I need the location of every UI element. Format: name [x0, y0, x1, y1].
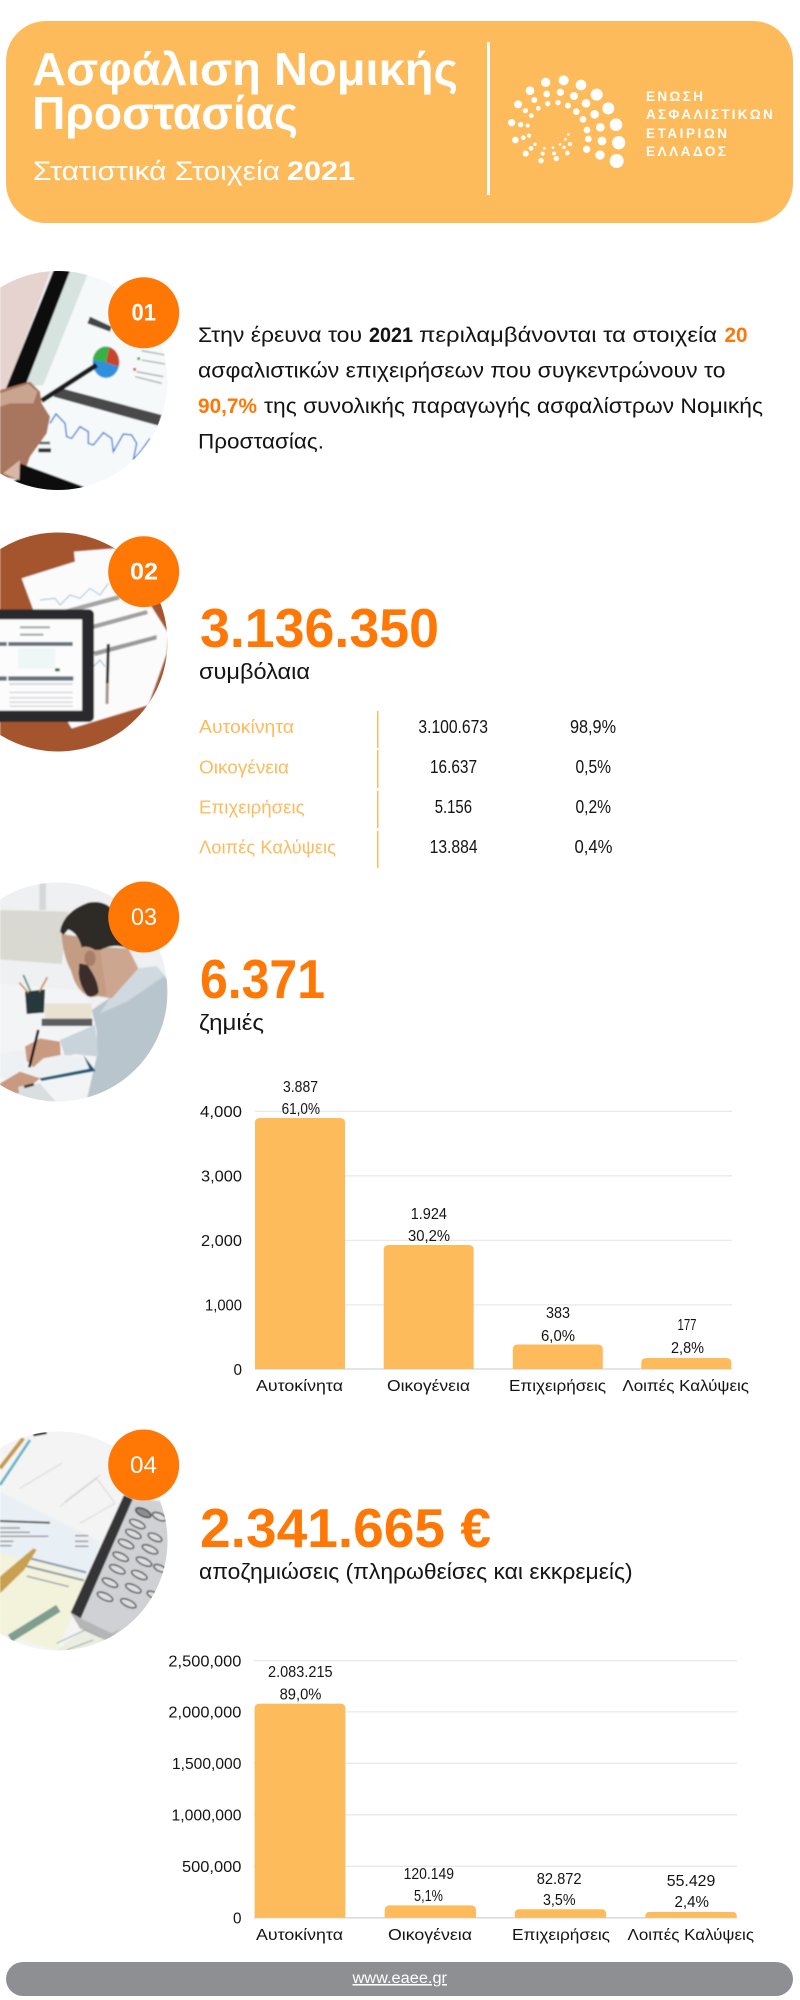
- bar chart: claims: [200, 1079, 749, 1395]
- section 02: [0, 520, 616, 868]
- badge 03: 03: [131, 904, 157, 931]
- bar: Αυτοκίνητα: [255, 1079, 345, 1395]
- y axis labels: 1,500,000: [172, 1756, 241, 1773]
- bar: Επιχειρήσεις: 3,5%: [543, 1892, 576, 1909]
- icon: association logo dots: [508, 75, 625, 168]
- bar: Λοιπές Καλύψεις: 177: [678, 1317, 697, 1334]
- logo text: [646, 89, 773, 159]
- headline: compensation: [199, 1497, 633, 1584]
- bar: Επιχειρήσεις: 6,0%: [541, 1328, 575, 1345]
- headline: compensation: 2.341.665 €: [200, 1497, 491, 1559]
- bar: Λοιπές Καλύψεις: Λοιπές Καλύψεις: [622, 1378, 749, 1395]
- bar: Οικογένεια: Οικογένεια: [388, 1927, 472, 1944]
- headline: contracts: συμβόλαια: [199, 659, 310, 684]
- bar: Επιχειρήσεις: 383: [546, 1305, 570, 1322]
- intro paragraph: 20: [724, 323, 748, 347]
- row: Οικογένεια: 16.637: [430, 757, 477, 777]
- row: Αυτοκίνητα: [199, 711, 616, 748]
- row: Επιχειρήσεις: Επιχειρήσεις: [199, 798, 305, 818]
- bar: Οικογένεια: [384, 1206, 474, 1395]
- bar: Αυτοκίνητα: Αυτοκίνητα: [256, 1378, 343, 1395]
- row: Οικογένεια: 0,5%: [576, 757, 611, 777]
- badge 02: [108, 536, 179, 607]
- intro paragraph: [198, 323, 763, 454]
- photo: calculator and financial papers: [0, 1432, 168, 1650]
- title: Ασφάλιση Νομικής: [32, 43, 458, 95]
- y axis labels: 4,000: [200, 1104, 242, 1121]
- badge 01: 01: [132, 300, 156, 326]
- bar: Επιχειρήσεις: [509, 1305, 606, 1395]
- bar: Αυτοκίνητα: [255, 1664, 345, 1944]
- badge 03: [108, 882, 179, 952]
- intro paragraph: της συνολικής παραγωγής ασφαλίστρων Νομικής: [264, 394, 763, 418]
- badge 02: 02: [130, 558, 158, 586]
- y axis labels: [200, 1104, 242, 1379]
- intro paragraph: Προστασίας.: [198, 430, 324, 454]
- photo: tablet and papers on wooden desk: [0, 532, 168, 752]
- bar: Οικογένεια: [385, 1866, 476, 1944]
- y axis labels: 0: [234, 1362, 242, 1379]
- badge 04: [108, 1430, 179, 1500]
- y axis labels: 2,500,000: [168, 1654, 241, 1670]
- intro paragraph: Στην έρευνα του: [198, 323, 362, 347]
- bar: Αυτοκίνητα: 89,0%: [280, 1686, 321, 1704]
- intro paragraph: περιλαμβάνονται τα στοιχεία: [419, 323, 717, 347]
- bar: Οικογένεια: 120.149: [404, 1866, 454, 1883]
- bar: Λοιπές Καλύψεις: [622, 1317, 749, 1395]
- bar: Λοιπές Καλύψεις: 2,4%: [674, 1894, 709, 1911]
- section 03: [0, 870, 749, 1395]
- bar: Λοιπές Καλύψεις: 55.429: [667, 1873, 715, 1890]
- row: Λοιπές Καλύψεις: 0,4%: [574, 837, 612, 857]
- bar: Λοιπές Καλύψεις: 2,8%: [671, 1340, 704, 1357]
- subtitle: 2021: [287, 156, 355, 186]
- row: Επιχειρήσεις: 0,2%: [576, 797, 611, 817]
- y axis labels: 3,000: [201, 1168, 242, 1186]
- subtitle: Στατιστικά Στοιχεία: [33, 156, 280, 186]
- intro paragraph: 2021: [369, 323, 413, 347]
- badge 01: [108, 277, 179, 348]
- row: Λοιπές Καλύψεις: Λοιπές Καλύψεις: [199, 838, 336, 858]
- logo text: ΑΣΦΑΛΙΣΤΙΚΩΝ: [646, 107, 773, 122]
- section 04: [0, 1420, 754, 1944]
- y axis labels: 2,000,000: [168, 1705, 241, 1722]
- row: Επιχειρήσεις: [199, 791, 611, 828]
- headline: claims: 6.371: [200, 948, 325, 1010]
- bar: Οικογένεια: Οικογένεια: [387, 1378, 470, 1395]
- title: Προστασίας: [32, 87, 298, 139]
- photo: tablet with charts and pen: [0, 271, 168, 490]
- bar: Λοιπές Καλύψεις: Λοιπές Καλύψεις: [628, 1927, 754, 1944]
- headline: contracts: 3.136.350: [200, 597, 439, 659]
- row: Οικογένεια: Οικογένεια: [199, 758, 289, 778]
- section 01: [0, 260, 763, 500]
- footer bar: www.eaee.gr: [351, 1970, 447, 1987]
- photo: man writing at desk: [0, 882, 168, 1102]
- intro paragraph: ασφαλιστικών επιχειρήσεων που συγκεντρώνουν το: [198, 358, 726, 382]
- logo text: ΕΤΑΙΡΙΩΝ: [646, 126, 727, 141]
- y axis labels: 1,000,000: [172, 1808, 242, 1824]
- bar: Οικογένεια: 5,1%: [414, 1888, 443, 1905]
- row: Λοιπές Καλύψεις: [199, 831, 612, 868]
- y axis labels: 1,000: [205, 1298, 242, 1314]
- footer bar: [6, 1962, 793, 1996]
- title: [32, 43, 458, 139]
- intro paragraph: 90,7%: [198, 394, 257, 418]
- bar: Επιχειρήσεις: Επιχειρήσεις: [512, 1927, 610, 1944]
- bar chart: compensation: [168, 1654, 754, 1944]
- bar: Αυτοκίνητα: 61,0%: [282, 1101, 320, 1118]
- bar: Λοιπές Καλύψεις: [628, 1873, 754, 1944]
- header banner: [6, 21, 793, 223]
- headline: contracts: [199, 597, 439, 684]
- headline: compensation: αποζημιώσεις (πληρωθείσες και εκκρεμείς): [199, 1559, 633, 1584]
- headline: claims: ζημιές: [199, 1010, 264, 1035]
- row: Οικογένεια: [199, 750, 611, 788]
- bar: Οικογένεια: 1.924: [411, 1206, 447, 1223]
- row: Επιχειρήσεις: 5.156: [435, 797, 472, 817]
- y axis labels: 0: [233, 1910, 242, 1928]
- row: Αυτοκίνητα: 98,9%: [570, 717, 616, 737]
- headline: claims: [199, 948, 325, 1035]
- bar: Αυτοκίνητα: Αυτοκίνητα: [256, 1927, 343, 1944]
- row: Λοιπές Καλύψεις: 13.884: [430, 837, 478, 857]
- contracts table: [199, 711, 616, 868]
- row: Αυτοκίνητα: Αυτοκίνητα: [199, 717, 294, 737]
- bar: Επιχειρήσεις: [512, 1871, 610, 1944]
- logo text: ΕΛΛΑΔΟΣ: [646, 144, 726, 159]
- row: Αυτοκίνητα: 3.100.673: [418, 717, 488, 737]
- subtitle: [33, 156, 355, 186]
- bar: Επιχειρήσεις: Επιχειρήσεις: [509, 1378, 606, 1395]
- logo text: ΕΝΩΣΗ: [646, 89, 703, 104]
- bar: Οικογένεια: 30,2%: [408, 1228, 450, 1245]
- y axis labels: 500,000: [182, 1859, 241, 1876]
- y axis labels: 2,000: [201, 1233, 242, 1250]
- bar: Αυτοκίνητα: 3.887: [283, 1079, 318, 1096]
- badge 04: 04: [130, 1452, 157, 1479]
- y axis labels: [168, 1654, 242, 1928]
- bar: Αυτοκίνητα: 2.083.215: [268, 1664, 333, 1681]
- bar: Επιχειρήσεις: 82.872: [537, 1871, 582, 1888]
